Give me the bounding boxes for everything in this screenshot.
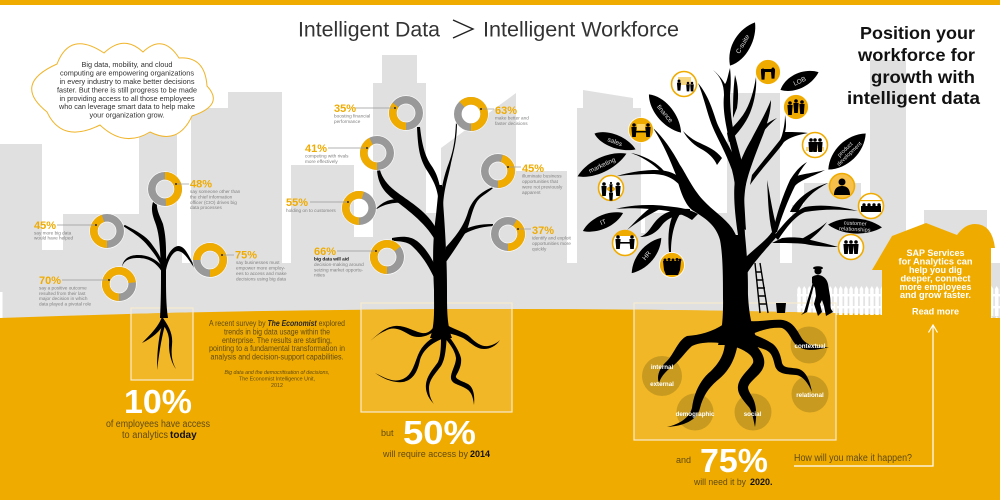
farmer silhouette bbox=[801, 266, 833, 316]
question and arrow bbox=[794, 325, 938, 466]
right heading: Position your bbox=[860, 23, 975, 43]
icon: seated team bbox=[858, 194, 884, 218]
label 37% bbox=[517, 225, 572, 252]
icon: leader bbox=[830, 174, 854, 198]
label 45% right: opportunities that bbox=[522, 179, 559, 184]
label 66%: big data will aid bbox=[314, 256, 349, 262]
root labels bbox=[650, 343, 826, 418]
label 41%: 41% bbox=[305, 143, 327, 155]
leaf: HR bbox=[626, 233, 667, 278]
donut 35% bbox=[393, 100, 419, 126]
house callout: Read more bbox=[912, 306, 959, 316]
icon: crowd bbox=[660, 252, 684, 278]
house callout: more employees bbox=[900, 282, 972, 292]
label 41% bbox=[305, 143, 368, 164]
icon: three colleagues bbox=[838, 234, 864, 260]
stat: 75%: and bbox=[676, 455, 691, 465]
label 75%: ees to access and make bbox=[236, 271, 287, 276]
donut 70% bbox=[106, 271, 132, 297]
leaf: LOB: LOB bbox=[792, 76, 807, 88]
stat: 75% bbox=[676, 442, 773, 487]
labels tree 1 bbox=[34, 178, 287, 306]
label 35% bbox=[334, 103, 396, 124]
label 45%: 45% bbox=[34, 220, 56, 232]
label 66%: 66% bbox=[314, 246, 336, 258]
label 45% right: apparent bbox=[522, 190, 541, 195]
leaves bbox=[574, 18, 882, 278]
label 70%: 70% bbox=[39, 275, 61, 287]
donut 37% bbox=[490, 216, 526, 252]
house callout: and grow faster. bbox=[900, 290, 971, 300]
label 55%: 55% bbox=[286, 197, 308, 209]
label 70% bbox=[39, 275, 110, 306]
donut 75% bbox=[197, 247, 223, 273]
leaf: finance bbox=[643, 89, 687, 138]
label 45% right: 45% bbox=[522, 163, 544, 175]
label 75%: 75% bbox=[235, 250, 257, 262]
labels tree 2 bbox=[286, 103, 572, 278]
tree 2: medium bbox=[370, 122, 500, 405]
stat: 75%: will need it by bbox=[693, 477, 746, 487]
donut 55% bbox=[346, 195, 372, 221]
cloud callout: computing are empowering organizations bbox=[60, 68, 194, 78]
leaf: marketing: marketing bbox=[588, 156, 617, 175]
label 70%: data played a pivotal role bbox=[39, 302, 92, 306]
label 35%: boosting financial bbox=[334, 114, 370, 118]
stat: 10%: to analytics bbox=[122, 430, 168, 441]
ladder bbox=[755, 263, 768, 313]
icon: people top right bbox=[756, 60, 780, 84]
stat: 50% bbox=[381, 414, 490, 459]
top bar bbox=[0, 0, 1000, 5]
survey text: 2012 bbox=[271, 383, 283, 389]
leaf: LOB bbox=[777, 65, 822, 96]
leaf: customer relationships: customer bbox=[843, 220, 867, 228]
label 48%: the chief information bbox=[190, 194, 233, 200]
root labels: contextual bbox=[795, 343, 826, 350]
cloud callout: Big data, mobility, and cloud bbox=[82, 60, 172, 69]
label 70%: major decision in which bbox=[39, 296, 88, 301]
label 63%: faster decisions bbox=[495, 121, 528, 126]
donut charts tree 2 bbox=[346, 95, 526, 270]
right heading: growth with bbox=[871, 67, 975, 87]
stat: 10% bbox=[106, 383, 210, 441]
label 48%: officer (CIO) drives big bbox=[190, 200, 237, 205]
label 41%: competing with rivals bbox=[305, 154, 349, 158]
leaf: product development bbox=[822, 126, 872, 177]
label 45%: say more big data bbox=[34, 230, 72, 236]
root labels: internal bbox=[651, 364, 673, 371]
root labels: social bbox=[744, 411, 762, 418]
cloud callout: your organization grow. bbox=[90, 110, 164, 120]
label 48%: say someone other than bbox=[190, 189, 241, 194]
donut 66% bbox=[374, 244, 400, 270]
house callout: for Analytics can bbox=[898, 256, 972, 266]
label 45% right: were not previously bbox=[522, 184, 563, 190]
label 55%: holding on to customers bbox=[286, 208, 336, 213]
icon: meeting table orange bbox=[628, 118, 654, 142]
cloud callout: who can leverage smart data to help make bbox=[58, 102, 195, 111]
stat: 50%: 50% bbox=[403, 414, 476, 451]
label 45% right bbox=[507, 163, 563, 195]
label 70%: say a positive outcome bbox=[39, 286, 87, 290]
stat: 50%: but bbox=[381, 428, 394, 438]
stat: 75%: 75% bbox=[700, 442, 768, 479]
label 37%: quickly bbox=[532, 246, 547, 252]
survey text: Big data and the democritisation of decisions, bbox=[224, 370, 330, 376]
house callout bbox=[872, 223, 995, 322]
bucket bbox=[776, 303, 786, 313]
root labels: external bbox=[650, 381, 674, 388]
donut 45% right bbox=[482, 155, 514, 187]
title: Intelligent Workforce bbox=[483, 18, 679, 42]
label 35%: performance bbox=[334, 119, 361, 124]
label 45%: would have helped bbox=[34, 236, 73, 240]
label 48%: 48% bbox=[190, 178, 212, 190]
label 70%: resulted from their last bbox=[39, 291, 86, 296]
tree 1: small bbox=[122, 202, 198, 370]
question and arrow: How will you make it happen? bbox=[794, 453, 912, 464]
root circles bbox=[642, 326, 828, 430]
leaf: product development: development bbox=[836, 141, 864, 168]
label 66%: seizing market opportu- bbox=[314, 268, 363, 272]
tree 3: large bbox=[616, 68, 858, 427]
label 37%: 37% bbox=[532, 225, 554, 237]
title bbox=[298, 18, 679, 42]
leaf: sales: sales bbox=[606, 136, 624, 148]
stat: 10%: today bbox=[170, 430, 197, 441]
title: Intelligent Data bbox=[298, 18, 440, 42]
house callout: deeper, connect bbox=[900, 274, 971, 284]
leaf: IT: IT bbox=[599, 218, 607, 227]
label 75%: say businesses must bbox=[236, 260, 280, 265]
icon: three heads bbox=[784, 94, 808, 120]
label 48% bbox=[175, 178, 241, 210]
label 45% right: illuminate business bbox=[522, 174, 562, 178]
leaf: HR: HR bbox=[641, 250, 653, 262]
root labels: relational bbox=[796, 392, 824, 399]
leaf: customer relationships: relationships bbox=[839, 226, 871, 234]
house callout: SAP Services bbox=[906, 248, 965, 258]
label 35%: 35% bbox=[334, 103, 356, 115]
donut charts tree 1 bbox=[94, 176, 223, 297]
icon: round table bbox=[598, 176, 624, 201]
icon: table discussion bbox=[612, 230, 638, 256]
right heading bbox=[847, 23, 980, 108]
root labels: demographic bbox=[676, 411, 715, 418]
label 48%: data processes bbox=[190, 205, 222, 210]
label 63%: 63% bbox=[495, 105, 517, 117]
survey text: trends in big data usage within the bbox=[224, 328, 331, 336]
leaf: IT bbox=[580, 207, 626, 237]
icon: three standing bbox=[802, 132, 828, 158]
survey text: The Economist Intelligence Unit, bbox=[239, 376, 315, 382]
label 41%: more effectively bbox=[305, 159, 338, 164]
survey text bbox=[209, 319, 345, 389]
label 63% bbox=[480, 105, 529, 126]
label 55% bbox=[286, 197, 349, 213]
stat: 50%: will require access by bbox=[382, 449, 468, 459]
label 45% bbox=[34, 220, 97, 240]
label 66% bbox=[314, 246, 377, 278]
survey text: pointing to a fundamental transformation in bbox=[209, 344, 345, 353]
right heading: workforce for bbox=[857, 45, 975, 65]
stat: 50%: 2014 bbox=[470, 449, 490, 459]
stat: 10%: of employees have access bbox=[106, 419, 210, 430]
leaf: customer relationships bbox=[828, 217, 882, 235]
cloud callout: faster. But there is still progress to be made bbox=[57, 86, 197, 94]
icon: presenter and group bbox=[672, 72, 696, 96]
ground bbox=[0, 309, 1000, 500]
cloud callout bbox=[32, 43, 213, 139]
leaf: C-suite bbox=[722, 18, 762, 70]
leaf: C-suite: C-suite bbox=[735, 33, 752, 55]
donut 45% bbox=[94, 218, 120, 244]
root boxes bbox=[131, 303, 836, 440]
leaf: finance: finance bbox=[655, 104, 674, 125]
picket fence bbox=[797, 286, 1000, 318]
leaf: marketing bbox=[574, 147, 629, 183]
label 63%: make better and bbox=[495, 116, 529, 120]
house callout: help you dig bbox=[909, 265, 962, 275]
donut 48% bbox=[152, 176, 178, 202]
donut 63% bbox=[452, 95, 490, 133]
cloud callout: in providing access to all those employees bbox=[60, 94, 195, 103]
donut 41% bbox=[364, 140, 390, 166]
label 37%: identify and exploit bbox=[532, 236, 572, 240]
label 75%: empower more employ- bbox=[236, 266, 286, 270]
leaf: product development: product bbox=[837, 141, 855, 159]
people icons bbox=[598, 60, 884, 278]
survey text: A recent survey by The Economist explored bbox=[209, 319, 345, 328]
label 75% bbox=[221, 250, 287, 282]
label 66%: decision-making around bbox=[314, 262, 364, 267]
stat: 75%: 2020. bbox=[750, 477, 773, 487]
survey text: enterprise. The results are startling, bbox=[222, 336, 332, 345]
leaf: sales bbox=[592, 127, 638, 155]
skyline background bbox=[0, 55, 1000, 324]
right heading: intelligent data bbox=[847, 88, 980, 108]
label 75%: decisions using big data bbox=[236, 276, 286, 282]
cloud callout: in every industry to make better decisions bbox=[60, 77, 195, 86]
survey text: analysis and decision-support capabilities. bbox=[210, 352, 344, 362]
label 37%: opportunities more bbox=[532, 241, 571, 246]
label 66%: nities bbox=[314, 272, 326, 278]
stat: 10%: 10% bbox=[124, 383, 192, 420]
